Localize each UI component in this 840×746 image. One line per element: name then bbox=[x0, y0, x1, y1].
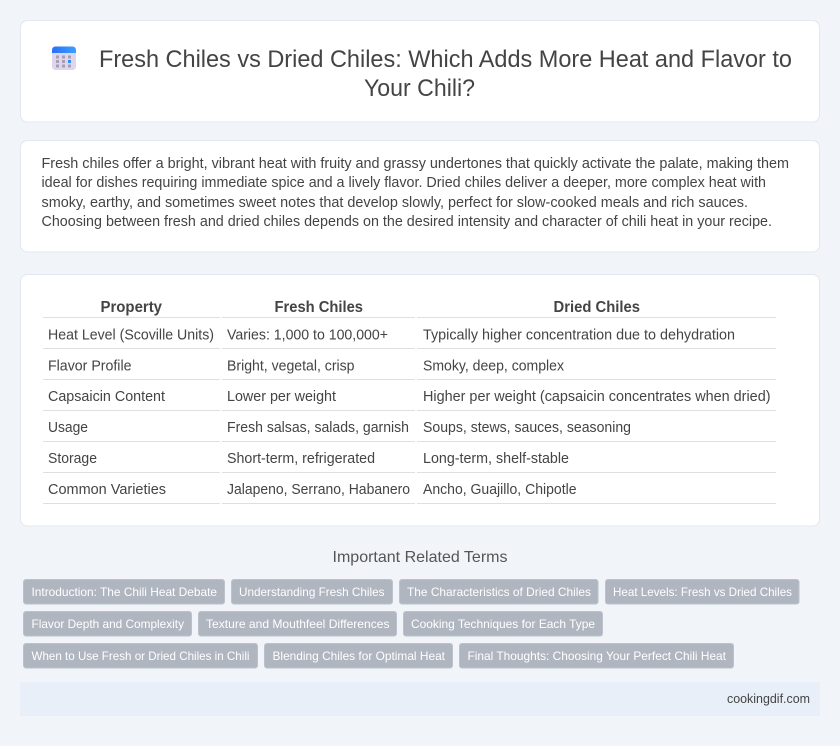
text block: introduction paragraph: Fresh chiles offer a bright, vibrant heat with fruity and grassy undertones that quickly activate the palate, making them bbox=[42, 156, 789, 172]
table row: flavor profile: Flavor Profile bbox=[48, 358, 132, 374]
tag: texture and mouthfeel: Texture and Mouthfeel Differences bbox=[206, 617, 390, 631]
table row: capsaicin content bbox=[48, 389, 770, 405]
text block: introduction paragraph: Choosing between fresh and dried chiles depends on the desired intensity and character of chili heat in your recipe. bbox=[42, 214, 772, 230]
table header: Property bbox=[100, 299, 162, 316]
related terms tags bbox=[24, 580, 799, 668]
table row: usage bbox=[48, 420, 631, 436]
title: Your Chili? bbox=[364, 75, 475, 102]
tag: when to use bbox=[24, 644, 258, 668]
tag: cooking techniques bbox=[404, 612, 602, 636]
heading: important related terms: Important Related Terms bbox=[332, 549, 508, 566]
table row: common varieties: Common Varieties bbox=[48, 482, 166, 498]
table row: capsaicin content: Higher per weight (capsaicin concentrates when dried) bbox=[423, 389, 770, 405]
tag: when to use: When to Use Fresh or Dried Chiles in Chili bbox=[32, 649, 250, 663]
tag: introduction: Introduction: The Chili Heat Debate bbox=[32, 585, 217, 599]
tag: characteristics of dried chiles: The Characteristics of Dried Chiles bbox=[407, 585, 591, 599]
tag: blending chiles bbox=[264, 644, 452, 668]
tag: heat levels bbox=[606, 580, 799, 604]
table row: usage: Usage bbox=[48, 420, 88, 436]
title bbox=[99, 46, 792, 102]
tag: blending chiles: Blending Chiles for Optimal Heat bbox=[272, 649, 446, 663]
table row: heat level: Varies: 1,000 to 100,000+ bbox=[227, 328, 388, 344]
title: Fresh Chiles vs Dried Chiles: Which Adds More Heat and Flavor to bbox=[99, 46, 792, 73]
table row: flavor profile bbox=[48, 358, 565, 374]
table row: usage: Fresh salsas, salads, garnish bbox=[227, 420, 409, 436]
tag: texture and mouthfeel bbox=[198, 612, 396, 636]
text block: introduction paragraph: smoky, earthy, and sometimes sweet notes that develop slowly, perfect for slow-cooked meals and rich sauces. bbox=[42, 195, 748, 211]
table header: Fresh Chiles bbox=[274, 299, 363, 316]
icon: calendar bbox=[52, 46, 76, 70]
tag: final thoughts: Final Thoughts: Choosing Your Perfect Chili Heat bbox=[468, 649, 727, 663]
table row: capsaicin content: Capsaicin Content bbox=[48, 389, 165, 405]
tag: characteristics of dried chiles bbox=[400, 580, 598, 604]
table row: storage: Storage bbox=[48, 451, 97, 467]
table row: storage: Long-term, shelf-stable bbox=[423, 451, 569, 467]
table row: flavor profile: Smoky, deep, complex bbox=[423, 358, 565, 374]
tag: final thoughts bbox=[460, 644, 734, 668]
table row: flavor profile: Bright, vegetal, crisp bbox=[227, 358, 354, 374]
table row: storage bbox=[48, 451, 569, 467]
tag: heat levels: Heat Levels: Fresh vs Dried Chiles bbox=[613, 585, 792, 599]
table row: heat level: Heat Level (Scoville Units) bbox=[48, 328, 214, 344]
table header: Dried Chiles bbox=[554, 299, 640, 316]
tag: understanding fresh chiles bbox=[232, 580, 392, 604]
footer bbox=[20, 682, 820, 716]
table row: heat level: Typically higher concentration due to dehydration bbox=[423, 328, 735, 344]
tag: flavor depth bbox=[24, 612, 192, 636]
table row: common varieties: Ancho, Guajillo, Chipotle bbox=[423, 482, 576, 498]
tag: understanding fresh chiles: Understanding Fresh Chiles bbox=[239, 585, 384, 599]
tag: cooking techniques: Cooking Techniques for Each Type bbox=[411, 617, 595, 631]
footer credit: cookingdif.com bbox=[727, 691, 810, 706]
table row: storage: Short-term, refrigerated bbox=[227, 451, 375, 467]
panel: comparison table bbox=[20, 274, 820, 526]
table row: heat level bbox=[48, 328, 735, 344]
text block: introduction paragraph bbox=[42, 156, 789, 230]
table row: common varieties bbox=[48, 482, 576, 498]
panel: introduction bbox=[20, 140, 820, 252]
panel: title card bbox=[20, 20, 820, 122]
tag: flavor depth: Flavor Depth and Complexity bbox=[32, 617, 184, 631]
table row: common varieties: Jalapeno, Serrano, Habanero bbox=[227, 482, 410, 498]
table row: usage: Soups, stews, sauces, seasoning bbox=[423, 420, 631, 436]
tag: introduction bbox=[24, 580, 224, 604]
text block: introduction paragraph: ideal for dishes requiring immediate spice and a lively flavor. Dried chiles deliver a deeper, more complex heat with bbox=[42, 175, 766, 191]
table header bbox=[100, 299, 640, 316]
table row: capsaicin content: Lower per weight bbox=[227, 389, 336, 405]
